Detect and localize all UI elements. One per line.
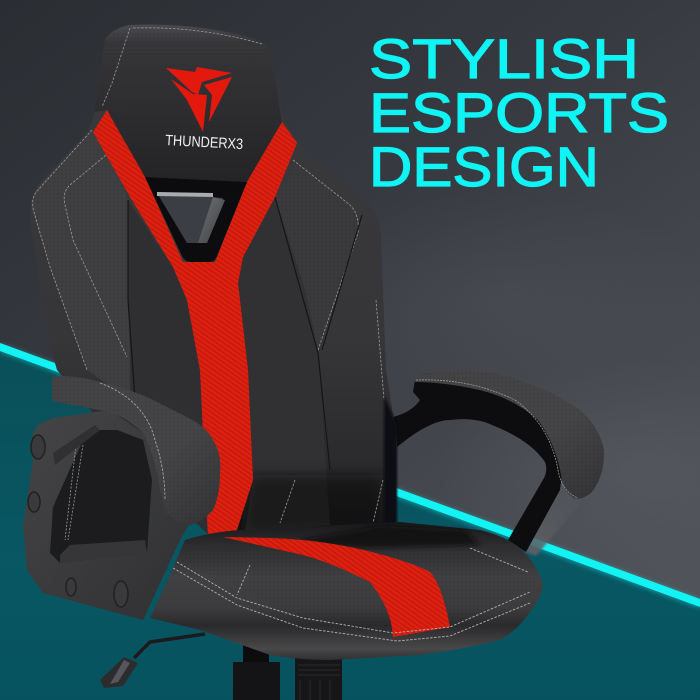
headrest — [94, 25, 282, 182]
right arm pad — [415, 370, 604, 499]
background: teal floor — [0, 347, 700, 700]
view through arm opening — [50, 430, 152, 563]
headrest triangle opening — [145, 177, 247, 262]
left arm stitching — [100, 383, 165, 500]
chair base column — [233, 645, 342, 700]
left arm strut — [53, 425, 100, 465]
frame screw caps — [28, 435, 128, 607]
left wing panel — [31, 130, 130, 400]
backrest — [30, 25, 397, 545]
back right black column — [384, 395, 397, 525]
title line 1: STYLISH — [369, 27, 639, 90]
title line 3: DESIGN — [369, 135, 599, 198]
logo mark — [166, 67, 232, 132]
logo wordmark: THUNDERX3 — [165, 132, 244, 153]
back stitching — [33, 28, 384, 523]
right arm shadow side — [525, 480, 582, 556]
height adjust lever — [100, 634, 205, 688]
left center panel — [128, 200, 218, 535]
seat stitching — [173, 548, 530, 641]
backrest shell — [30, 25, 397, 545]
red seat strip — [223, 537, 450, 637]
seat top shadow — [300, 526, 480, 548]
left armrest — [23, 376, 220, 620]
brand logo — [165, 67, 244, 153]
lower back shadow — [240, 475, 384, 535]
right arm black support — [390, 380, 565, 552]
title line 2: ESPORTS — [369, 81, 669, 144]
right inner panel — [275, 163, 358, 350]
seat cushion — [150, 522, 543, 660]
right center panel — [238, 197, 330, 532]
right armrest — [390, 370, 604, 556]
seat — [150, 522, 543, 660]
left arm plastic frame — [23, 410, 190, 620]
title — [369, 27, 669, 198]
cyan neon line — [0, 343, 700, 609]
red mesh Y strip — [93, 110, 297, 537]
left arm pad — [52, 376, 220, 525]
